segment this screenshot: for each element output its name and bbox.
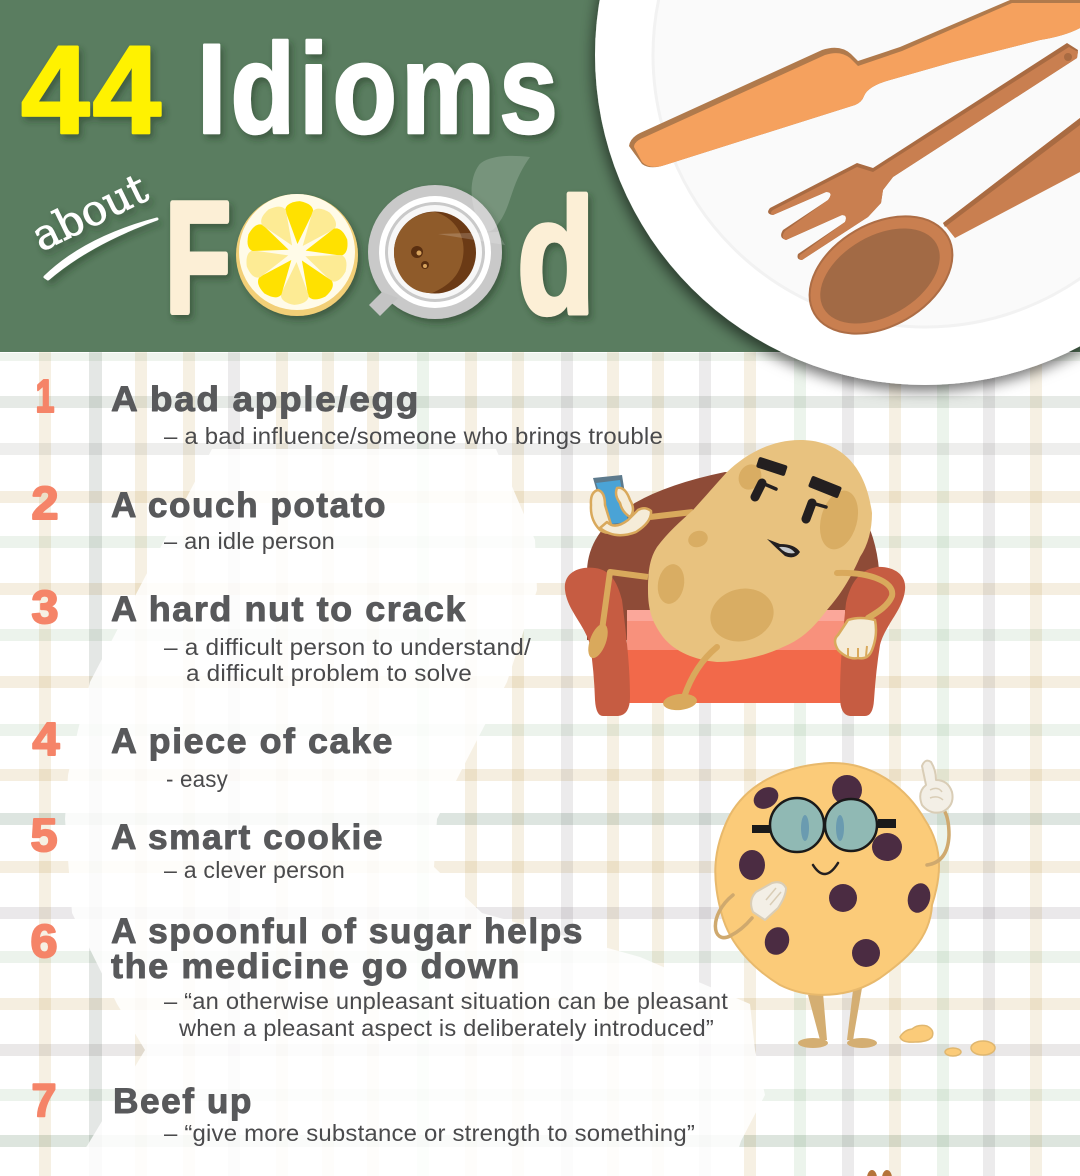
- glove pointing up: [920, 761, 953, 813]
- idiom 4: A piece of cake: [111, 722, 394, 761]
- icon: steam: [438, 156, 530, 245]
- idiom 2: 2: [32, 477, 58, 529]
- idiom 6: when a pleasant aspect is deliberately introduced”: [178, 1015, 714, 1041]
- icon: knife: [629, 0, 1080, 167]
- idiom 6: 6: [30, 915, 58, 967]
- idiom 5: [30, 809, 384, 883]
- idiom 2: A couch potato: [111, 486, 387, 525]
- glove right hand: [835, 618, 876, 658]
- idiom 3: a difficult problem to solve: [186, 660, 472, 686]
- idiom 4: - easy: [166, 766, 228, 792]
- idiom 3: 3: [32, 581, 58, 633]
- idiom 3: A hard nut to crack: [111, 590, 467, 629]
- icon: spoon: [808, 118, 1080, 335]
- idiom 2: [32, 477, 387, 554]
- sofa: [565, 472, 905, 716]
- idiom 7: – “give more substance or strength to something”: [164, 1120, 695, 1146]
- idiom 4: 4: [32, 713, 60, 765]
- idiom 5: A smart cookie: [111, 818, 384, 857]
- idiom 7: Beef up: [113, 1082, 253, 1121]
- illustration: couch potato: [565, 440, 905, 716]
- idiom 5: 5: [30, 809, 58, 861]
- next illustration peeking at bottom: [867, 1170, 892, 1176]
- title: about: about: [24, 163, 155, 261]
- idiom 7: [32, 1074, 695, 1146]
- smile: [813, 863, 838, 874]
- crumbs: [900, 1025, 995, 1056]
- header band: [0, 0, 1080, 352]
- chocolate chips: [739, 775, 934, 967]
- title: 44 Idioms: Idioms: [197, 18, 562, 161]
- idiom 6: [30, 912, 728, 1041]
- idiom 1: A bad apple/egg: [111, 380, 420, 419]
- glasses: [752, 798, 896, 852]
- glove holding phone: [591, 488, 651, 535]
- arms: [715, 812, 949, 938]
- idiom 2: – an idle person: [164, 528, 335, 554]
- idiom 6: – “an otherwise unpleasant situation can be pleasant: [164, 988, 728, 1014]
- title: 44 Idioms: [21, 18, 562, 161]
- icon: fork: [768, 43, 1078, 260]
- idiom 3: [32, 581, 531, 686]
- potato face: [755, 457, 842, 557]
- illustration: smart cookie: [715, 761, 995, 1056]
- icon: coffee cup: [368, 156, 530, 319]
- title: d: d: [517, 165, 595, 348]
- legs: [798, 988, 877, 1048]
- glove on chest: [751, 882, 786, 920]
- idiom 1: [36, 370, 663, 449]
- idiom 1: – a bad influence/someone who brings trouble: [164, 423, 663, 449]
- title: F: F: [165, 170, 231, 346]
- idiom 1: 1: [36, 370, 54, 422]
- idiom 4: [32, 713, 394, 792]
- idiom 3: – a difficult person to understand/: [164, 634, 531, 660]
- phone: [593, 475, 630, 527]
- idiom 6: A spoonful of sugar helps: [111, 912, 584, 951]
- title: 44 Idioms: 44: [21, 21, 164, 160]
- arm and leg: [684, 573, 892, 697]
- idiom 5: – a clever person: [164, 857, 345, 883]
- idiom 6: the medicine go down: [111, 947, 521, 986]
- translucent white text backdrop: [60, 449, 765, 1176]
- idiom 7: 7: [32, 1074, 56, 1126]
- potato body: [648, 440, 872, 662]
- cookie body: [715, 763, 939, 995]
- limbs behind: [602, 512, 693, 630]
- plate with cutlery: [595, 0, 1080, 385]
- icon: lemon slice: [236, 194, 358, 316]
- potato spots: [655, 461, 864, 648]
